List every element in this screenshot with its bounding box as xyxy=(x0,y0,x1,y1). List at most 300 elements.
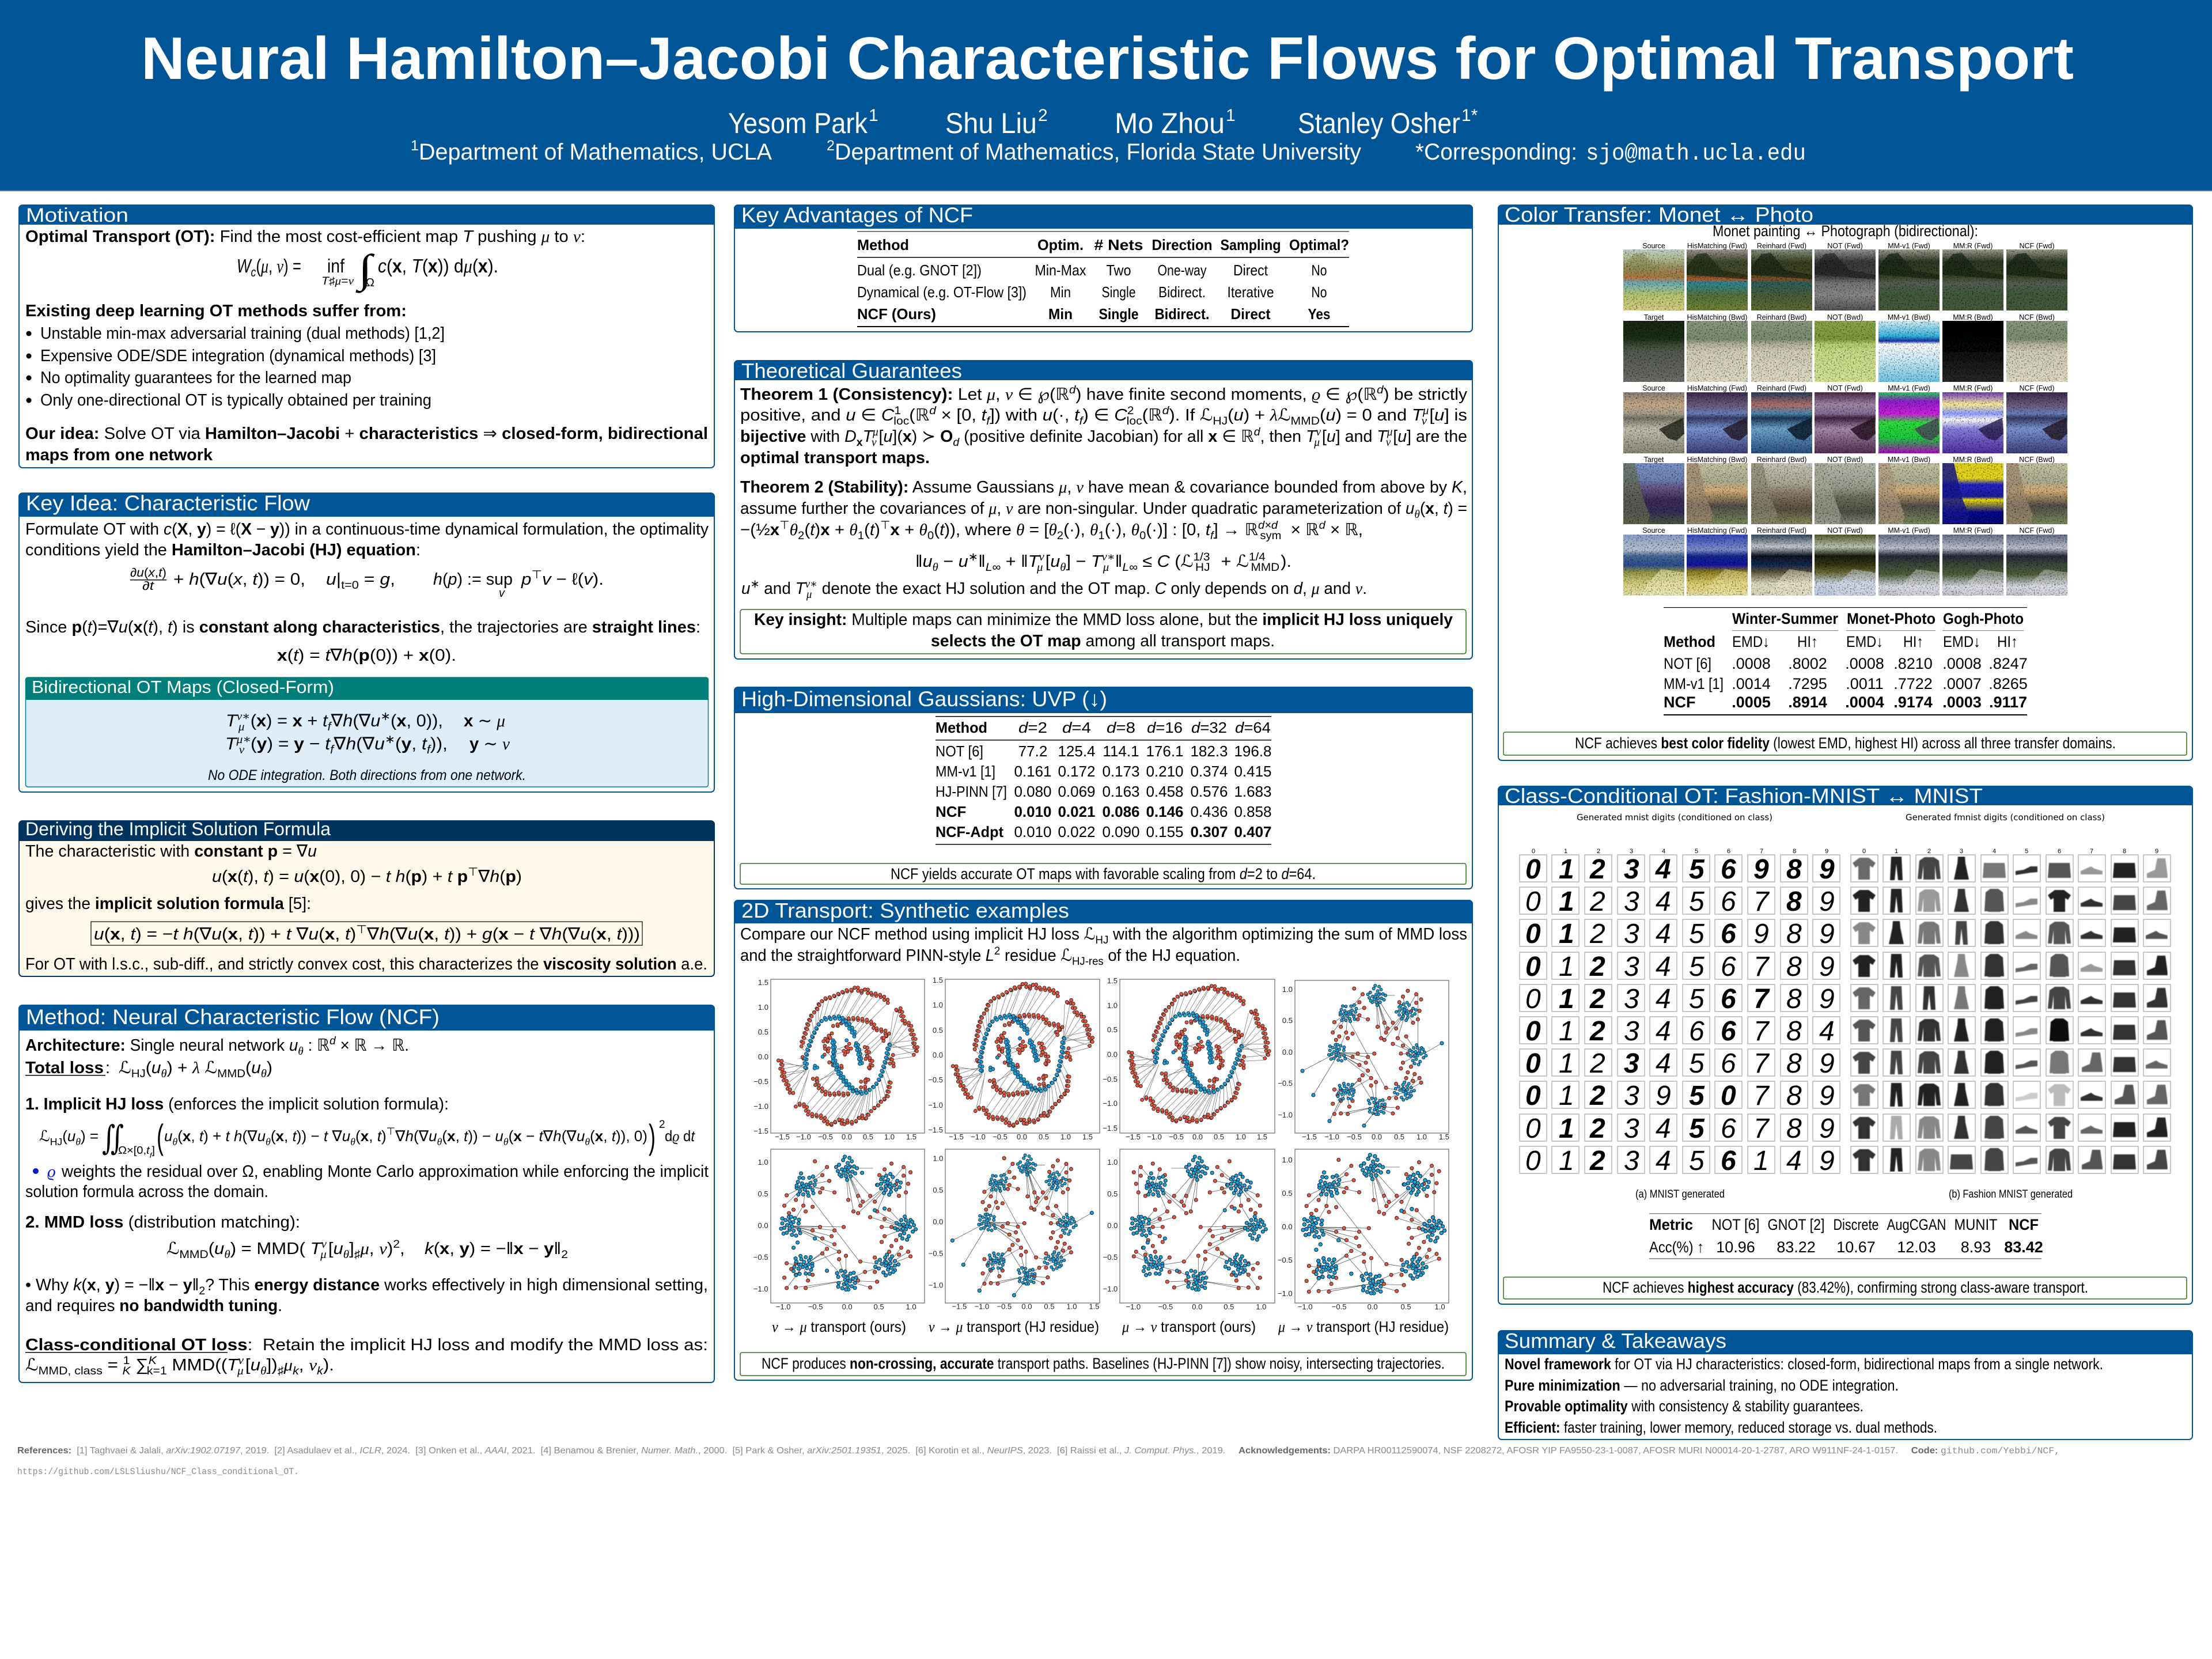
table: comparison: # Nets xyxy=(1094,236,1143,253)
chart: gaussians mu to nu HJ residue (top): −0.5 xyxy=(1278,1079,1293,1088)
heading: Class-Conditional OT: Fashion-MNIST ↔ MNIST xyxy=(1505,784,1983,808)
chart: gaussians mu to nu HJ residue (bottom): 0.0 xyxy=(1368,1302,1378,1311)
image labels: NCF (Bwd) xyxy=(2019,313,2055,321)
equations: bidirectional maps: Tν∗μ (x) = x + tf∇h(∇u∗(x, 0)), xyxy=(226,710,443,733)
chart: gaussians nu to mu HJ residue: 1.0 xyxy=(933,1154,943,1162)
panel: 2D transport xyxy=(734,899,1473,1380)
table: UVP: d=4 xyxy=(1062,719,1091,736)
table: color transfer metrics: .0005 xyxy=(1732,694,1771,711)
chart: gaussians mu to nu ours: −0.5 xyxy=(1103,1253,1118,1262)
equation: Wasserstein cost: c(x, T(x)) dμ(x). xyxy=(378,255,498,277)
equation: HJ: ∂t xyxy=(142,579,154,593)
table: comparison xyxy=(857,231,1349,327)
table: UVP: 0.374 xyxy=(1190,763,1228,780)
table: color transfer metrics: .0011 xyxy=(1846,675,1884,692)
authors: 1* xyxy=(1461,106,1478,125)
image labels: MM-v1 (Bwd) xyxy=(1888,456,1930,464)
chart: gaussians mu to nu HJ residue (bottom): 1.0 xyxy=(1282,1156,1293,1164)
image labels: MM:R (Fwd) xyxy=(1953,242,1993,250)
chart: gaussians mu to nu HJ residue (bottom): −1.0 xyxy=(1278,1289,1293,1298)
equation: Wasserstein cost: inf xyxy=(327,255,345,276)
title banner xyxy=(0,0,2212,191)
chart: gaussians nu to mu ours: 0.0 xyxy=(842,1302,853,1311)
table: comparison: Single xyxy=(1099,305,1138,323)
plot captions: ν → μ transport (ours) xyxy=(772,1318,906,1335)
chart: moons nu to mu HJ residue: −1.0 xyxy=(971,1132,986,1141)
chart: gaussians mu to nu HJ residue (top): 0.5 xyxy=(1282,1016,1293,1025)
table: comparison: One-way xyxy=(1158,262,1206,279)
chart: gaussians nu to mu HJ residue: −0.5 xyxy=(997,1302,1012,1311)
image labels: Reinhard (Bwd) xyxy=(1757,456,1806,464)
table: accuracy: 8.93 xyxy=(1961,1238,1991,1256)
chart: gaussians mu to nu ours: −0.5 xyxy=(1158,1302,1173,1311)
text block: derivation: The characteristic with constant p = ∇u xyxy=(25,842,317,861)
image grid: generated MNIST digits: 0 1 2 3 46 6 7 8 4 xyxy=(1525,1016,1835,1047)
table: color transfer metrics: .0008 xyxy=(1732,655,1771,672)
table: comparison: Single xyxy=(1101,283,1136,301)
MMD loss heading: 2. MMD loss (distribution matching): xyxy=(25,1213,300,1232)
equation: implicit HJ loss: Ω×[0, tf] xyxy=(118,1145,155,1160)
chart: gaussians mu to nu ours: −1.0 xyxy=(1126,1302,1141,1311)
table: comparison: Bidirect. xyxy=(1158,283,1206,301)
equation: HJ: p⊤v − ℓ(v). xyxy=(521,569,604,589)
architecture: Architecture: Single neural network uθ : ℝd × ℝ → ℝ. xyxy=(25,1035,409,1058)
table: UVP: 0.069 xyxy=(1058,783,1096,800)
callout: 2D takeaway: NCF produces non-crossing, accurate transport paths. Baselines (HJ-PINN [7]) show noisy, intersecting trajectories. xyxy=(762,1355,1445,1372)
table: UVP: 0.210 xyxy=(1146,763,1184,780)
chart: moons mu to nu ours: 1.0 xyxy=(1236,1132,1246,1141)
table: UVP: 0.436 xyxy=(1190,803,1228,820)
authors: Shu Liu xyxy=(945,107,1037,139)
heading: High-Dimensional Gaussians: UVP (↓) xyxy=(741,687,1107,711)
chart: moons mu to nu ours: 1.5 xyxy=(1257,1132,1267,1141)
theorem 1: Theorem 1 (Consistency): Let μ, ν ∈ ℘(ℝd) have finite second moments, ϱ ∈ ℘(ℝd) be strictly xyxy=(740,384,1468,404)
takeaways list: Novel framework for OT via HJ characteristics: closed-form, bidirectional maps from a single network. xyxy=(1505,1355,2103,1373)
chart: moons nu to mu ours: 1.0 xyxy=(758,1003,768,1012)
table: color transfer metrics: .0003 xyxy=(1942,694,1982,711)
chart: moons mu to nu ours: −0.5 xyxy=(1169,1132,1184,1141)
equation: implicit HJ loss: ℒHJ(uθ) = xyxy=(39,1127,99,1147)
footer: references and acknowledgements: https://github.com/LSLSliushu/NCF_Class_conditional_OT. xyxy=(17,1467,299,1477)
table: accuracy: AugCGAN xyxy=(1887,1216,1946,1233)
text block: derivation xyxy=(25,842,707,974)
image labels: Reinhard (Fwd) xyxy=(1757,527,1806,535)
theorem 2 xyxy=(740,478,1467,601)
chart: moons nu to mu ours: 0.5 xyxy=(758,1028,768,1036)
chart: gaussians mu to nu HJ residue (bottom): 0.0 xyxy=(1282,1222,1293,1231)
table: UVP xyxy=(935,716,1272,844)
table: UVP: 0.576 xyxy=(1190,783,1228,800)
table: UVP: 0.080 xyxy=(1014,783,1052,800)
table: UVP: MM-v1 [1] xyxy=(935,763,995,780)
callout: class takeaway xyxy=(1503,1277,2187,1299)
panel: high-dimensional gaussians xyxy=(734,687,1473,889)
equation: HJ: h(p) := sup xyxy=(433,570,513,589)
affiliations: Department of Mathematics, Florida State University xyxy=(835,139,1361,165)
table: UVP: 0.010 xyxy=(1014,803,1052,820)
frames for image cells xyxy=(1520,855,2171,1173)
equation: stability bound: ‖uθ − u∗‖L∞ + ‖Tνμ[uθ] − Tν∗μ ‖L∞ ≤ C (ℒ1/3HJ + ℒ1/4MMD). xyxy=(915,551,1291,574)
table: color transfer metrics: .8247 xyxy=(1988,655,2028,672)
note: rho weights: solution formula across the domain. xyxy=(25,1183,268,1201)
table: color transfer metrics xyxy=(1664,607,2028,715)
equation: HJ xyxy=(130,566,604,600)
table: color transfer metrics: HI↑ xyxy=(1797,633,1818,650)
table: UVP: 176.1 xyxy=(1146,743,1184,760)
note: rho weights xyxy=(25,1162,709,1201)
equation: Wasserstein cost: Wc(μ, ν) = xyxy=(237,255,301,279)
theorem 1: positive, and u ∈ C1loc(ℝd × [0, tf]) with u(·, tf) ∈ C2loc(ℝd). If ℒ HJ(u) + λℒMMD(u) = 0 and Tμν[u] is xyxy=(740,404,1467,427)
chart: gaussians nu to mu ours: −0.5 xyxy=(808,1302,823,1311)
table: UVP: 0.407 xyxy=(1234,823,1272,840)
chart: moons nu to mu ours: 1.5 xyxy=(906,1132,916,1141)
footer: references and acknowledgements: References: [1] Taghvaei & Jalali, arXiv:1902.07197, 2019. [2] Asadulaev et al., ICLR, 2024. [3] Onken et al., AAAI, 2021. [4] Benamou & Brenier, Numer. Math., 2000. [5] Park & Osher, arXiv:2501.19351, 2025. [6] Korotin et al., NeurIPS, 2023. [6] Raissi et al., J. Comput. Phys., 2019. Acknowledgements: DARPA HR00112590074, NSF 2208272, AFOSR YIP FA9550-23-1-0087, AFOSR MURI N00014-20-1-2787, ARO W911NF-24-1-0157. Code: github.com/Yebbi/NCF, xyxy=(17,1446,2060,1456)
note: rho weights: ϱ xyxy=(47,1162,56,1181)
table: color transfer metrics: EMD↓ xyxy=(1943,633,1980,650)
table: UVP: 0.415 xyxy=(1234,763,1272,780)
table: UVP: Method xyxy=(935,719,987,736)
equation: HJ: + h(∇u(x, t)) = 0, xyxy=(173,570,305,589)
table: color transfer metrics: Winter-Summer xyxy=(1732,610,1838,627)
table: comparison: Bidirect. xyxy=(1154,305,1210,323)
equation: MMD loss: ℒMMD(uθ) = MMD( Tνμ[uθ]♯μ, ν)2, k(x, y) = −‖x − y‖2 xyxy=(166,1238,568,1261)
heading: Key Idea: Characteristic Flow xyxy=(26,491,310,515)
text block: existing methods: Existing deep learning OT methods suffer from: xyxy=(25,302,407,320)
image labels: Target xyxy=(1644,456,1664,464)
chart: gaussians nu to mu ours: 0.0 xyxy=(758,1221,768,1230)
chart: gaussians nu to mu HJ residue: 0.5 xyxy=(933,1185,943,1195)
image grid: generated MNIST digits: 0 1 2 3456789 xyxy=(1525,952,1835,982)
table: UVP: 0.172 xyxy=(1058,763,1096,780)
bullet list xyxy=(26,324,445,410)
boxed formula: u(x, t) = −t h(∇u(x, t)) + t ∇u(x, t)⊤∇h(∇u(x, t)) + g(x − t ∇h(∇u(x, t))) xyxy=(94,923,640,944)
table: comparison: No xyxy=(1311,283,1327,301)
table: UVP: 0.022 xyxy=(1058,823,1096,840)
table: UVP: d=2 xyxy=(1018,719,1047,736)
image labels: Reinhard (Bwd) xyxy=(1757,313,1806,321)
table: UVP: 0.021 xyxy=(1058,803,1096,820)
table: accuracy: 83.22 xyxy=(1777,1238,1816,1256)
note: energy distance: and requires no bandwidth tuning. xyxy=(25,1297,282,1315)
chart: gaussians mu to nu ours: 1.0 xyxy=(1256,1302,1266,1311)
chart: moons mu to nu ours: 0.0 xyxy=(1107,1050,1118,1059)
table: color transfer metrics: Monet-Photo xyxy=(1847,610,1936,627)
chart: gaussians mu to nu ours: 0.5 xyxy=(1107,1190,1118,1198)
affiliations: 2 xyxy=(827,138,835,154)
chart: gaussians nu to mu HJ residue: −1.5 xyxy=(952,1302,967,1311)
table: accuracy: Metric xyxy=(1649,1216,1693,1233)
chart: gaussians mu to nu ours: −1.0 xyxy=(1103,1285,1118,1293)
callout: color takeaway: NCF achieves best color fidelity (lowest EMD, highest HI) across all three transfer domains. xyxy=(1575,734,2116,752)
bullet list: Unstable min-max adversarial training (dual methods) [1,2] xyxy=(40,324,445,343)
chart: gaussians mu to nu HJ residue (top): 1.0 xyxy=(1416,1132,1427,1141)
chart: moons nu to mu ours: 0.0 xyxy=(758,1052,768,1061)
table: color transfer metrics: MM-v1 [1] xyxy=(1664,675,1724,692)
image labels: HisMatching (Fwd) xyxy=(1687,242,1747,250)
equation: implicit HJ loss: 2 xyxy=(659,1119,665,1131)
image grid: generated MNIST digits: 01 2 345 6 149 xyxy=(1525,1146,1835,1176)
takeaways list: Pure minimization — no adversarial training, no ODE integration. xyxy=(1505,1377,1899,1394)
note: No ODE integration. Both directions from one network. xyxy=(208,767,526,783)
table: comparison: Yes xyxy=(1308,305,1331,323)
equation: straight line: x(t) = t∇h(p(0)) + x(0). xyxy=(277,646,456,665)
chart: gaussians mu to nu HJ residue (bottom): −0.5 xyxy=(1278,1256,1293,1264)
table: color transfer metrics: .0008 xyxy=(1942,655,1982,672)
figure captions: (b) Fashion MNIST generated xyxy=(1949,1188,2073,1200)
sub-heading: Bidirectional OT Maps (Closed-Form) xyxy=(32,677,334,697)
chart: moons nu to mu ours: −0.5 xyxy=(818,1132,833,1141)
table: UVP: d=8 xyxy=(1107,719,1135,736)
table: color transfer metrics: .0004 xyxy=(1845,694,1884,711)
chart: gaussians mu to nu HJ residue (top): −1.5 xyxy=(1302,1132,1317,1141)
chart: moons nu to mu ours: −1.5 xyxy=(753,1127,768,1135)
table: accuracy: NCF xyxy=(2009,1216,2039,1233)
image labels: NCF (Fwd) xyxy=(2019,242,2055,250)
table: UVP: 0.010 xyxy=(1014,823,1052,840)
chart: gaussians mu to nu HJ residue (bottom): 0.5 xyxy=(1401,1302,1411,1311)
figure captions xyxy=(1635,1188,2073,1200)
chart: moons mu to nu ours xyxy=(1103,976,1275,1141)
chart: gaussians nu to mu HJ residue: 1.5 xyxy=(1089,1302,1099,1311)
table: accuracy: 12.03 xyxy=(1897,1238,1936,1256)
chart: gaussians mu to nu HJ residue (bottom): 1.0 xyxy=(1435,1302,1445,1311)
plot captions: μ → ν transport (ours) xyxy=(1122,1318,1256,1335)
theorem 1 xyxy=(740,384,1468,467)
table: UVP: 0.173 xyxy=(1102,763,1140,780)
image labels: NCF (Bwd) xyxy=(2019,456,2055,464)
chart: moons nu to mu ours: 0.0 xyxy=(842,1132,852,1141)
image labels: HisMatching (Fwd) xyxy=(1687,527,1747,535)
table: UVP: d=32 xyxy=(1191,719,1227,736)
panel: class-conditional OT xyxy=(1498,784,2193,1304)
chart: moons nu to mu HJ residue: −1.0 xyxy=(928,1101,943,1109)
text block: formulation: Formulate OT with c(X, y) = ℓ(X − y)) in a continuous-time dynamical formulation, the optimality xyxy=(25,520,709,539)
image labels: NOT (Fwd) xyxy=(1827,527,1863,535)
chart: gaussians mu to nu ours: 1.0 xyxy=(1107,1158,1118,1166)
authors: Yesom Park xyxy=(728,107,868,139)
chart: gaussians nu to mu ours xyxy=(753,1149,925,1311)
chart: gaussians mu to nu ours: 0.0 xyxy=(1107,1221,1118,1230)
text block: comparison description: and the straightforward PINN-style L2 residue ℒHJ-res of the HJ equation. xyxy=(740,945,1240,968)
chart: moons nu to mu ours: −1.0 xyxy=(753,1102,768,1111)
chart: moons mu to nu ours: −1.5 xyxy=(1126,1132,1141,1141)
equation: implicit HJ loss: dϱ dt xyxy=(665,1127,696,1145)
affiliations: 1 xyxy=(411,138,419,154)
total loss: : xyxy=(105,1059,110,1077)
chart: gaussians mu to nu HJ residue (top): 1.0 xyxy=(1282,985,1293,994)
image labels: NCF (Fwd) xyxy=(2019,384,2055,392)
takeaways list xyxy=(1505,1355,2103,1436)
table: color transfer metrics: HI↑ xyxy=(1997,633,2018,650)
sub-panel: bidirectional OT maps xyxy=(25,677,709,787)
table: UVP: d=64 xyxy=(1235,719,1271,736)
table: accuracy: NOT [6] xyxy=(1712,1216,1759,1233)
table: color transfer metrics: Gogh-Photo xyxy=(1943,610,2024,627)
total loss: Total loss xyxy=(25,1059,104,1077)
chart: gaussians mu to nu HJ residue (bottom): −0.5 xyxy=(1332,1302,1346,1311)
image labels: Source xyxy=(1642,384,1665,392)
text block: formulation xyxy=(25,520,709,665)
table: color transfer metrics: .8002 xyxy=(1788,655,1827,672)
callout: 2D takeaway xyxy=(740,1353,1466,1376)
table: comparison: Iterative xyxy=(1227,283,1274,301)
image labels: MM-v1 (Fwd) xyxy=(1888,242,1930,250)
chart: gaussians nu to mu ours: 0.5 xyxy=(758,1190,768,1198)
image grid: generated MNIST digits xyxy=(1525,854,1835,1176)
footer: references and acknowledgements xyxy=(17,1446,2060,1477)
chart: moons mu to nu ours: 1.5 xyxy=(1107,976,1118,985)
chart: gaussians nu to mu ours: −1.0 xyxy=(776,1302,790,1311)
image labels: HisMatching (Bwd) xyxy=(1687,456,1747,464)
chart: moons nu to mu ours xyxy=(753,978,925,1141)
table: accuracy: GNOT [2] xyxy=(1767,1216,1825,1233)
image labels: MM:R (Bwd) xyxy=(1953,313,1993,321)
table: comparison: Min xyxy=(1048,305,1073,323)
chart: gaussians mu to nu HJ residue (bottom) xyxy=(1278,1149,1449,1311)
table: UVP: 125.4 xyxy=(1058,743,1096,760)
chart: moons nu to mu HJ residue: 1.5 xyxy=(933,976,943,984)
table: comparison: Method xyxy=(857,236,909,253)
chart: moons nu to mu ours: −1.5 xyxy=(775,1132,790,1141)
text block: characteristics: Since p(t)=∇u(x(t), t) is constant along characteristics, the trajectories are straight lines: xyxy=(25,618,700,637)
theorem 2: assume further the covariances of μ, ν are non-singular. Under quadratic parameterization of uθ(x, t) = xyxy=(740,499,1467,521)
table: comparison: Dual (e.g. GNOT [2]) xyxy=(857,262,982,279)
table: comparison: Two xyxy=(1106,262,1131,279)
image labels: NOT (Fwd) xyxy=(1827,384,1863,392)
image grid: generated MNIST digits: 0 12 3 456789 xyxy=(1525,1048,1835,1079)
table: comparison: Dynamical (e.g. OT-Flow [3]) xyxy=(857,283,1027,301)
chart: gaussians nu to mu HJ residue: 0.5 xyxy=(1044,1302,1054,1311)
table: UVP: 0.858 xyxy=(1234,803,1272,820)
chart: moons mu to nu ours: 0.5 xyxy=(1214,1132,1224,1141)
equations: bidirectional maps: Tμ∗ν (y) = y − tf∇h(∇u∗(y, tf)), xyxy=(225,733,448,756)
text block: our idea xyxy=(25,425,708,464)
chart: gaussians mu to nu ours xyxy=(1103,1149,1275,1311)
theorem 2: −(½x⊤θ2(t)x + θ1(t)⊤x + θ0(t)), where θ = [θ2(·), θ1(·), θ0(·)] : [0, tf] → ℝd×dsym × ℝd × ℝ, xyxy=(740,519,1363,542)
chart: gaussians mu to nu HJ residue (top): −1.0 xyxy=(1324,1132,1339,1141)
theorem 2: Theorem 2 (Stability): Assume Gaussians μ, ν have mean & covariance bounded from above by K, xyxy=(740,478,1467,497)
equations: bidirectional maps xyxy=(225,710,510,756)
heading: Method: Neural Characteristic Flow (NCF) xyxy=(26,1005,440,1029)
chart: gaussians mu to nu HJ residue (top): 0.0 xyxy=(1282,1048,1293,1056)
takeaways list: Provable optimality with consistency & stability guarantees. xyxy=(1505,1397,1863,1415)
image labels: Source xyxy=(1642,242,1665,250)
chart: gaussians nu to mu HJ residue xyxy=(929,1149,1100,1311)
image labels: MM:R (Fwd) xyxy=(1953,527,1993,535)
text block: viscosity: For OT with l.s.c., sub-diff., and strictly convex cost, this characterizes the viscosity solution a.e. xyxy=(25,955,707,974)
table: color transfer metrics: .9117 xyxy=(1989,694,2027,711)
equation: implicit HJ loss xyxy=(39,1118,696,1160)
image labels: MM-v1 (Bwd) xyxy=(1888,313,1930,321)
title: Neural Hamilton–Jacobi Characteristic Flows for Optimal Transport xyxy=(141,25,2074,92)
figure subtitles: Generated mnist digits (conditioned on class) xyxy=(1577,812,1772,823)
table: UVP: 182.3 xyxy=(1190,743,1228,760)
table: UVP: HJ-PINN [7] xyxy=(935,783,1007,800)
equation: Wasserstein cost: Ω xyxy=(366,276,374,289)
image labels: MM:R (Fwd) xyxy=(1953,384,1993,392)
chart: gaussians mu to nu ours: 0.5 xyxy=(1224,1302,1234,1311)
chart: moons nu to mu ours: −0.5 xyxy=(753,1077,768,1086)
table: accuracy: Acc(%) ↑ xyxy=(1649,1238,1704,1256)
image labels: MM-v1 (Fwd) xyxy=(1888,527,1930,535)
table: comparison: Direct xyxy=(1230,305,1271,323)
table: color transfer metrics: NCF xyxy=(1664,694,1696,711)
table: UVP: 114.1 xyxy=(1103,743,1139,760)
table: comparison: Direct xyxy=(1233,262,1268,279)
takeaways list: Efficient: faster training, lower memory, reduced storage vs. dual methods. xyxy=(1505,1419,1937,1436)
callout: key insight: Key insight: Multiple maps can minimize the MMD loss alone, but the implicit HJ loss uniquely xyxy=(754,611,1453,629)
text block: formulation: conditions yield the Hamilton–Jacobi (HJ) equation: xyxy=(25,541,421,559)
chart: gaussians mu to nu HJ residue (top): −1.0 xyxy=(1278,1111,1293,1119)
plot captions: μ → ν transport (HJ residue) xyxy=(1278,1318,1449,1335)
table: color transfer metrics: .0007 xyxy=(1942,675,1982,692)
chart: gaussians nu to mu HJ residue: −0.5 xyxy=(929,1249,943,1258)
chart: moons nu to mu HJ residue: −0.5 xyxy=(928,1075,943,1084)
equation: Wasserstein cost: T♯μ=ν xyxy=(321,275,354,287)
affiliations: sjo@math.ucla.edu xyxy=(1586,141,1806,167)
text block: derivation: u(x(t), t) = u(x(0), 0) − t h(p) + t p⊤∇h(p) xyxy=(212,866,522,886)
image labels: Reinhard (Fwd) xyxy=(1757,242,1806,250)
chart: gaussians nu to mu ours: −0.5 xyxy=(753,1253,768,1262)
note: energy distance: • Why k(x, y) = −‖x − y‖2? This energy distance works effectively in high dimensional setting, xyxy=(25,1276,708,1297)
table: color transfer metrics: NOT [6] xyxy=(1664,655,1711,672)
callout: key insight: selects the OT map among all transport maps. xyxy=(931,632,1275,650)
equation: HJ: ∂u(x,t) xyxy=(130,566,166,579)
bullet list: No optimality guarantees for the learned map xyxy=(40,369,351,387)
text block: comparison description xyxy=(740,925,1467,968)
equation: HJ: u|t=0 = g, xyxy=(326,570,395,592)
callout: color takeaway xyxy=(1503,732,2187,755)
equation: Wasserstein cost xyxy=(237,247,498,293)
table: UVP: 0.458 xyxy=(1146,783,1184,800)
table: accuracy xyxy=(1649,1213,2043,1259)
image labels: MM:R (Bwd) xyxy=(1953,456,1993,464)
chart: moons nu to mu ours: −1.0 xyxy=(796,1132,811,1141)
authors xyxy=(728,106,1478,139)
panel: key advantages xyxy=(734,203,1473,332)
text block: our idea: Our idea: Solve OT via Hamilton–Jacobi + characteristics ⇒ closed-form, bidirectional xyxy=(25,425,708,443)
chart: moons nu to mu HJ residue: −1.5 xyxy=(928,1126,943,1134)
chart: moons nu to mu HJ residue: 0.0 xyxy=(933,1051,943,1059)
callout: UVP takeaway: NCF yields accurate OT maps with favorable scaling from d=2 to d=64. xyxy=(891,865,1316,882)
table: UVP: 0.307 xyxy=(1190,823,1228,840)
chart: moons nu to mu ours: 0.5 xyxy=(863,1132,873,1141)
image grid: generated MNIST digits: 0 1 234567 8 9 xyxy=(1525,887,1835,917)
table: color transfer metrics: EMD↓ xyxy=(1732,633,1770,650)
note: rho weights: weights the residual over Ω, enabling Monte Carlo approximation while enforcing the implicit xyxy=(61,1162,709,1181)
chart: gaussians nu to mu HJ residue: 0.0 xyxy=(1021,1302,1032,1311)
image grid: generated MNIST digits: 0 12 34 5 6789 xyxy=(1525,1113,1835,1144)
class-conditional loss xyxy=(25,1336,708,1377)
chart: moons nu to mu HJ residue: 1.0 xyxy=(933,1001,943,1009)
theorem 1: optimal transport maps. xyxy=(740,449,930,467)
chart: moons nu to mu HJ residue: −1.5 xyxy=(949,1132,964,1141)
image grid: generated MNIST digits: 01 2345 6 989 xyxy=(1525,919,1835,949)
text block: comparison description: Compare our NCF method using implicit HJ loss ℒHJ with the algorithm optimizing the sum of MMD loss xyxy=(740,925,1467,946)
note: energy distance xyxy=(25,1276,708,1315)
table: UVP: 196.8 xyxy=(1234,743,1272,760)
authors: Mo Zhou xyxy=(1115,107,1225,139)
plot captions: ν → μ transport (HJ residue) xyxy=(929,1318,1099,1335)
figure subtitles: Generated fmnist digits (conditioned on class) xyxy=(1906,812,2105,823)
table: accuracy: MUNIT xyxy=(1954,1216,1998,1233)
authors: 1 xyxy=(869,106,878,125)
table: UVP: NCF-Adpt xyxy=(935,823,1003,840)
table: UVP: 0.163 xyxy=(1102,783,1140,800)
image grid: color transfer results xyxy=(1623,249,2067,596)
table: color transfer metrics: .7722 xyxy=(1893,675,1933,692)
table: comparison: NCF (Ours) xyxy=(857,305,936,323)
